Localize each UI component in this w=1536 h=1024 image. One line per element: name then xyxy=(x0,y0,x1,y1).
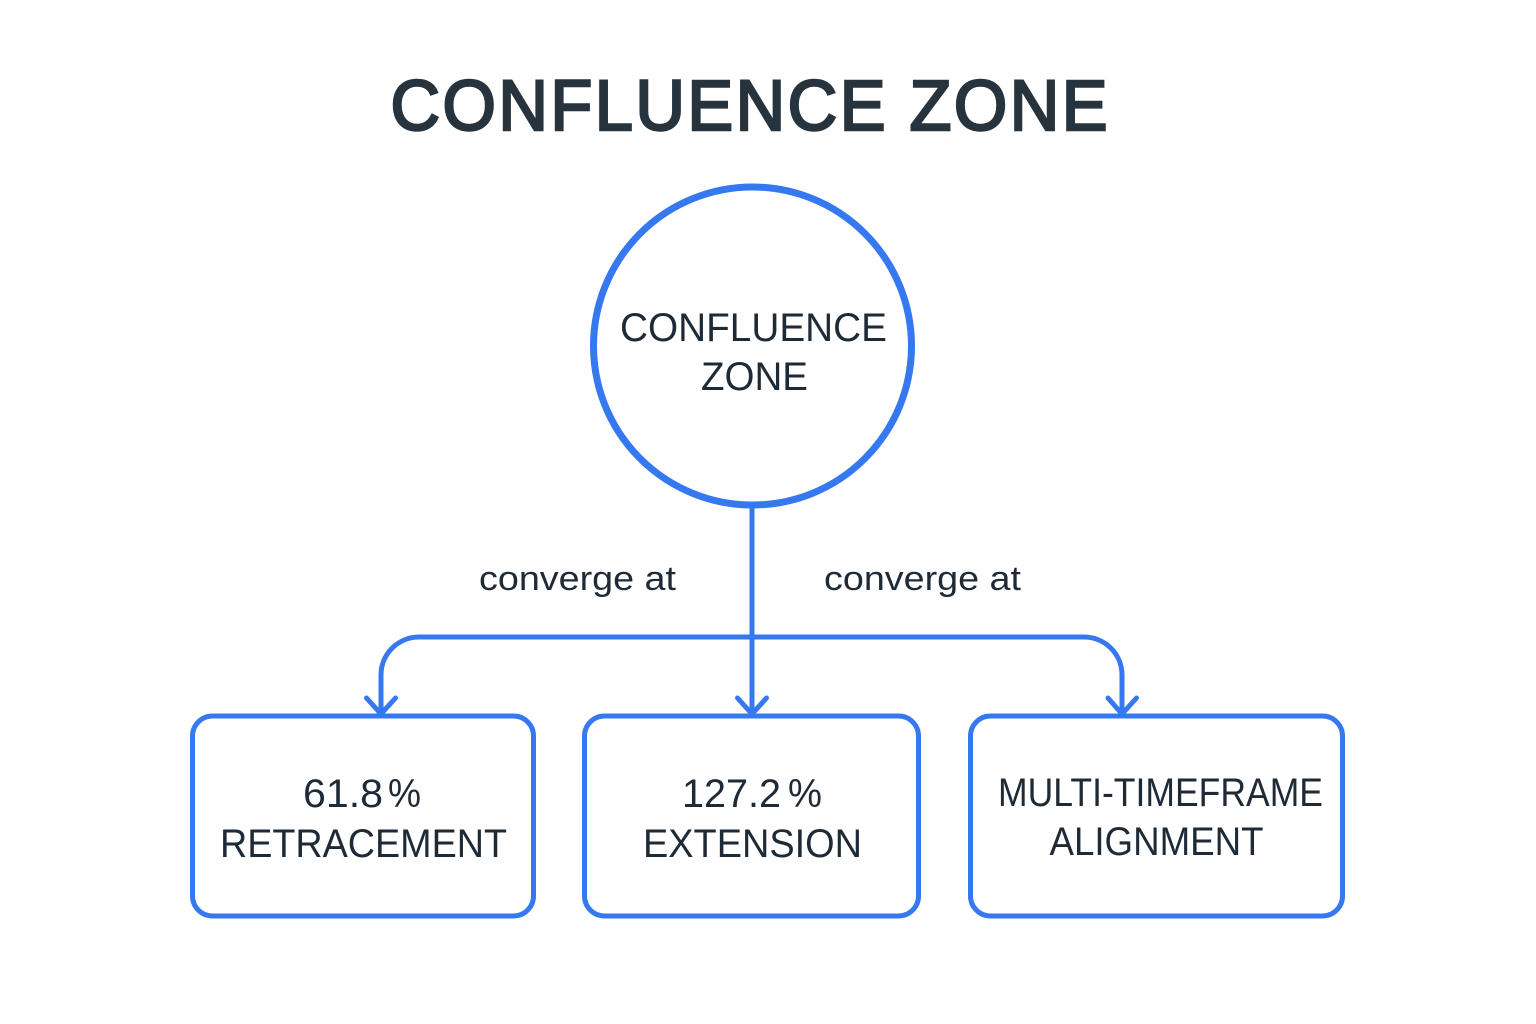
box: 61.8% retracement: RETRACEMENT xyxy=(220,822,507,866)
box: 127.2% extension: EXTENSION xyxy=(643,822,862,866)
box: 61.8% retracement: % xyxy=(388,772,421,816)
box: 61.8% retracement xyxy=(192,716,534,916)
box: 61.8% retracement: 61.8 xyxy=(303,772,383,816)
connector arrows xyxy=(366,508,1136,714)
box: 127.2% extension: % xyxy=(788,772,822,816)
left connector label: converge at xyxy=(479,560,677,598)
right connector label: converge at xyxy=(824,560,1022,598)
box: 127.2% extension xyxy=(584,716,918,916)
central circle: confluence zone: ZONE xyxy=(701,355,808,399)
box: 127.2% extension: 127.2 xyxy=(682,772,781,816)
box: multi-timeframe alignment: ALIGNMENT xyxy=(1050,820,1264,864)
box: multi-timeframe alignment xyxy=(970,716,1342,916)
central circle: confluence zone xyxy=(594,187,912,505)
central circle: confluence zone: CONFLUENCE xyxy=(620,306,887,350)
box: multi-timeframe alignment: MULTI-TIMEFRAME xyxy=(998,771,1323,815)
title: CONFLUENCE ZONE xyxy=(390,66,1108,145)
